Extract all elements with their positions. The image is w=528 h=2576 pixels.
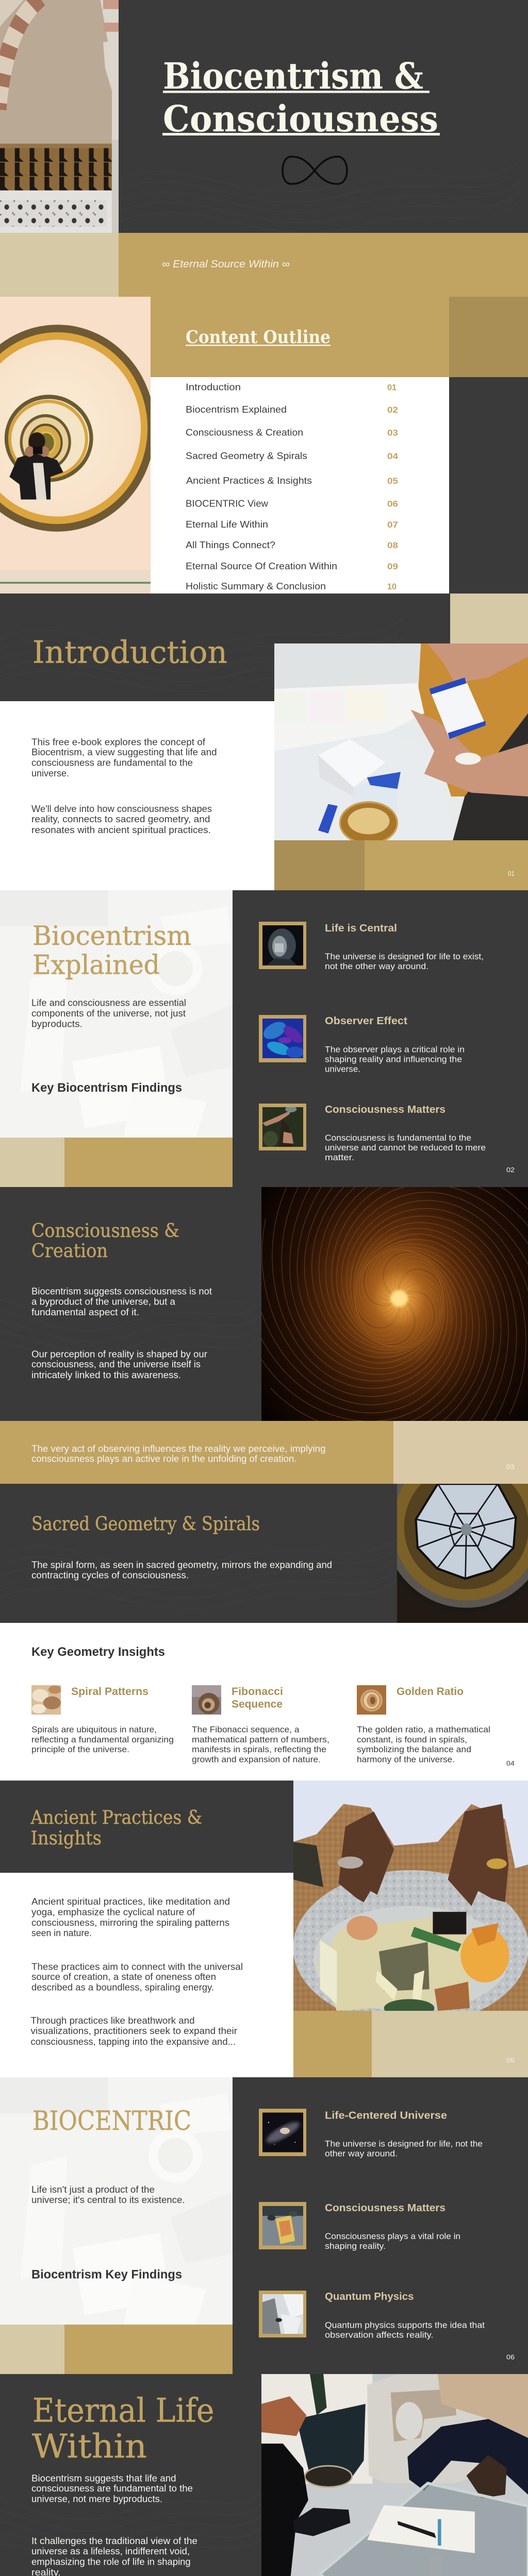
text block: consciousness are fundamental to the <box>31 2483 193 2494</box>
text block: visualizations, practitioners seek to expand their <box>31 2026 237 2036</box>
outline list: Introduction <box>186 382 241 393</box>
text block <box>31 997 186 1029</box>
heading: Eternal Life <box>32 2392 214 2430</box>
heading <box>30 1807 202 1849</box>
text block: Biocentrism suggests that life and <box>31 2473 176 2483</box>
finding: observer effect: Observer Effect <box>325 1015 407 1027</box>
photo: arched interior <box>0 0 119 233</box>
text block: fundamental aspect of it. <box>31 1307 139 1317</box>
finding: consciousness matters: matter. <box>325 1153 354 1162</box>
finding: consciousness matters: Consciousness Matters <box>325 2202 446 2214</box>
insight: golden ratio <box>357 1685 490 1765</box>
insight: fibonacci sequence: Fibonacci <box>232 1686 283 1698</box>
outline list: 01 <box>387 383 397 393</box>
subheading: Key Biocentrism Findings <box>31 1081 182 1095</box>
outline list: 02 <box>387 405 398 415</box>
text block: a byproduct of the universe, but a <box>31 1296 176 1307</box>
finding: life-centered universe: other way around. <box>325 2149 398 2159</box>
text block <box>31 2184 185 2205</box>
photo: hands with capsules <box>274 643 528 840</box>
finding: life is central: Life is Central <box>325 923 397 934</box>
insight: fibonacci sequence: manifests in spirals, reflecting the <box>192 1744 326 1754</box>
page number: 01 <box>508 870 515 877</box>
finding: consciousness matters: universe and cannot be reduced to mere <box>325 1143 486 1153</box>
insight: golden ratio: symbolizing the balance and <box>357 1744 471 1754</box>
text block: Through practices like breathwork and <box>31 2015 195 2026</box>
page number: 06 <box>506 2353 515 2361</box>
insight: spiral patterns: principle of the universe. <box>31 1744 129 1754</box>
insight: fibonacci sequence: mathematical pattern of numbers, <box>192 1735 329 1744</box>
text block: introduction: reality, connects to sacred geometry, and <box>31 814 210 824</box>
text block: consciousness, and the universe itself is <box>31 1359 201 1369</box>
heading <box>32 2392 214 2466</box>
panel: biocentrism explained findings <box>233 890 528 1187</box>
text block: universe, not mere byproducts. <box>31 2494 162 2504</box>
outline list: 09 <box>387 562 398 571</box>
text block: Life and consciousness are essential <box>31 997 186 1008</box>
text block: It challenges the traditional view of the <box>31 2536 197 2546</box>
finding: consciousness matters: Consciousness plays a vital role in <box>325 2231 460 2241</box>
text block: intricately linked to this awareness. <box>31 1370 181 1380</box>
heading: introduction: Introduction <box>32 634 227 670</box>
callout: consciousness plays an active role in the unfolding of creation. <box>31 1454 297 1464</box>
outline list <box>186 382 399 591</box>
outline list: BIOCENTRIC View <box>186 499 269 509</box>
title <box>162 55 440 140</box>
finding: observer effect: shaping reality and influencing the <box>325 1055 462 1064</box>
panel: biocentric findings <box>233 2077 528 2374</box>
text block: seen in nature. <box>31 1928 92 1938</box>
text block: introduction: consciousness are fundamental to the <box>31 758 193 768</box>
outline list: Sacred Geometry & Spirals <box>186 451 307 461</box>
tagline: ∞ Eternal Source Within ∞ <box>162 259 290 270</box>
text block: consciousness, tapping into the expansive and... <box>31 2037 236 2047</box>
text block: byproducts. <box>31 1019 82 1029</box>
text block: The spiral form, as seen in sacred geometry, mirrors the expanding and <box>31 1560 332 1570</box>
text block <box>31 1560 332 1581</box>
text block: Ancient spiritual practices, like meditation and <box>31 1896 230 1907</box>
insight: spiral patterns: reflecting a fundamental organizing <box>31 1735 174 1744</box>
text block: Life isn't just a product of the <box>31 2184 155 2195</box>
text block: components of the universe, not just <box>31 1008 186 1019</box>
outline list: 06 <box>387 499 398 509</box>
panel: tagline band <box>0 233 528 297</box>
insight: spiral patterns: Spiral Patterns <box>71 1686 148 1698</box>
callout: The very act of observing influences the reality we perceive, implying <box>31 1444 326 1454</box>
insight: fibonacci sequence: growth and expansion of nature. <box>192 1755 321 1765</box>
panel: key geometry insights <box>0 1623 528 1781</box>
text block: described as a boundless, spiraling energy. <box>31 1982 214 1993</box>
heading: BIOCENTRIC <box>32 2106 191 2137</box>
finding: life is central <box>259 922 484 971</box>
panel: introduction <box>0 594 528 890</box>
finding: quantum physics: Quantum physics supports the idea that <box>325 2320 485 2330</box>
outline list: 03 <box>387 428 398 438</box>
heading: Consciousness & <box>31 1221 179 1242</box>
page number: 03 <box>506 1463 515 1470</box>
panel: ancient practices <box>0 1781 528 2077</box>
text block <box>31 1896 243 2047</box>
finding: life-centered universe: Life-Centered Universe <box>325 2110 447 2121</box>
text block <box>31 1286 212 1380</box>
outline list: Eternal Source Of Creation Within <box>186 561 337 571</box>
insight: golden ratio: constant, is found in spirals, <box>357 1735 467 1744</box>
finding: life-centered universe <box>259 2109 483 2159</box>
heading: Creation <box>31 1241 108 1262</box>
photo: hands over ritual plate <box>293 1781 528 2011</box>
text block: contracting cycles of consciousness. <box>31 1570 189 1581</box>
outline list: Eternal Life Within <box>186 519 268 530</box>
text block: emphasizing the role of life in shaping <box>31 2556 191 2567</box>
page number: 04 <box>506 1759 515 1767</box>
outline list: All Things Connect? <box>186 540 275 550</box>
text block: universe; it's central to its existence. <box>31 2195 185 2205</box>
insight: fibonacci sequence <box>192 1685 329 1765</box>
subheading: Biocentrism Key Findings <box>31 2268 182 2281</box>
finding: consciousness matters: Consciousness Matters <box>325 1104 446 1115</box>
heading <box>31 1221 179 1262</box>
finding: observer effect <box>259 1015 465 1074</box>
outline list: 04 <box>387 451 399 461</box>
panel: consciousness and creation <box>0 1095 528 1502</box>
finding: life is central: The universe is designed for life to exist, <box>325 952 484 961</box>
photo: spiral mirror with photographer <box>0 297 151 594</box>
text block: yoga, emphasize the cyclical nature of <box>31 1907 195 1918</box>
text block <box>31 2473 197 2576</box>
finding: quantum physics: Quantum Physics <box>325 2291 414 2302</box>
text block: introduction: This free e-book explores the concept of <box>31 737 206 747</box>
outline list: 07 <box>387 520 398 530</box>
text block: These practices aim to connect with the universal <box>31 1961 243 1972</box>
text block: Biocentrism suggests consciousness is not <box>31 1286 212 1297</box>
outline list: 10 <box>387 582 397 591</box>
finding: consciousness matters: Consciousness is fundamental to the <box>325 1133 471 1143</box>
finding: consciousness matters <box>259 1104 486 1162</box>
heading: Biocentrism <box>32 921 191 952</box>
insight: fibonacci sequence: The Fibonacci sequence, a <box>192 1725 300 1735</box>
outline list: 08 <box>387 540 398 550</box>
heading: Explained <box>32 951 160 981</box>
finding: consciousness matters <box>259 2202 460 2251</box>
text block: universe as a lifeless, indifferent void, <box>31 2546 190 2556</box>
text block: introduction: Biocentrism, a view suggesting that life and <box>31 747 217 757</box>
page number: 05 <box>506 2057 515 2064</box>
photo: octagonal glass dome <box>397 1484 528 1623</box>
heading: Sacred Geometry & Spirals <box>31 1514 260 1535</box>
panel: sacred geometry <box>0 1440 528 1623</box>
outline list: Biocentrism Explained <box>186 404 287 415</box>
panel: eternal life within <box>0 2374 528 2576</box>
title: Consciousness <box>163 97 438 140</box>
heading: Within <box>32 2428 147 2466</box>
insight: golden ratio: harmony of the universe. <box>357 1755 455 1765</box>
heading: content outline: Content Outline <box>186 327 331 348</box>
text block: consciousness, mirroring the spiraling patterns <box>31 1918 229 1928</box>
finding: observer effect: The observer plays a critical role in <box>325 1045 465 1055</box>
text block: introduction: universe. <box>31 768 69 778</box>
text block: introduction: We'll delve into how consciousness shapes <box>31 804 212 814</box>
finding: quantum physics <box>259 2291 485 2340</box>
title: Biocentrism & <box>163 55 423 97</box>
insight: golden ratio: The golden ratio, a mathematical <box>357 1725 490 1735</box>
outline list: Consciousness & Creation <box>186 428 303 438</box>
heading: Insights <box>31 1828 102 1849</box>
outline list: Holistic Summary & Conclusion <box>186 581 326 591</box>
heading: Ancient Practices & <box>30 1807 202 1828</box>
finding: life-centered universe: The universe is designed for life, not the <box>325 2139 483 2148</box>
text block: introduction: resonates with ancient spiritual practices. <box>31 825 211 835</box>
finding: observer effect: universe. <box>325 1064 360 1074</box>
outline list: 05 <box>387 476 398 486</box>
icon: infinity symbol <box>283 157 347 184</box>
callout <box>31 1444 326 1464</box>
heading: Key Geometry Insights <box>31 1645 165 1659</box>
finding: consciousness matters: shaping reality. <box>325 2241 386 2251</box>
finding: life is central: not the other way around. <box>325 961 428 971</box>
text block: introduction <box>31 737 217 835</box>
panel: biocentrism explained left <box>0 890 233 1187</box>
photo: golden light spiral <box>261 1187 528 1421</box>
panel: cover <box>0 0 528 233</box>
insight: golden ratio: Golden Ratio <box>397 1686 464 1698</box>
heading <box>32 921 191 981</box>
page number: 02 <box>506 1166 515 1174</box>
text block: source of creation, a state of oneness often <box>31 1972 216 1982</box>
text block: Our perception of reality is shaped by our <box>31 1349 207 1359</box>
finding: quantum physics: observation affects reality. <box>325 2330 433 2340</box>
insight: spiral patterns <box>31 1685 174 1754</box>
photo: therapy session living room <box>261 2374 528 2576</box>
outline list: Ancient Practices & Insights <box>186 476 312 486</box>
panel: biocentric left <box>0 2077 233 2374</box>
insight: spiral patterns: Spirals are ubiquitous in nature, <box>31 1725 157 1735</box>
panel: content outline <box>0 297 528 594</box>
insight: fibonacci sequence: Sequence <box>232 1698 283 1710</box>
